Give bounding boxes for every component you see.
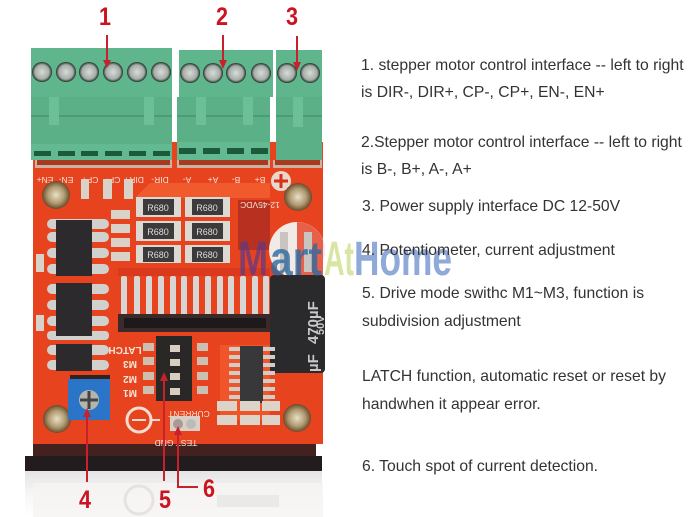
power resistors: R680 (147, 250, 169, 260)
silkscreen pin labels: EN+ (37, 175, 53, 185)
arrow 2 (216, 3, 228, 69)
description 3: 3. Power supply interface DC 12-50V (362, 198, 621, 215)
small SMD parts (36, 179, 133, 331)
arrow 6: 6 (203, 475, 215, 503)
blue potentiometer (68, 375, 110, 420)
description latch: LATCH function, automatic reset or reset by (362, 368, 666, 385)
terminal block 3 (276, 50, 322, 160)
arrow 6 (174, 426, 215, 503)
silkscreen switch labels: LATCH (108, 344, 142, 355)
driver chip U5 (229, 346, 275, 403)
arrow 3: 3 (286, 3, 298, 31)
capacitor body (270, 275, 327, 373)
terminal block 1 (31, 48, 172, 160)
description 2: is B-, B+, A-, A+ (361, 161, 472, 178)
description 1 (361, 57, 684, 101)
description 1: is DIR-, DIR+, CP-, CP+, EN-, EN+ (361, 84, 605, 101)
description 5 (362, 285, 644, 330)
watermark: M (238, 233, 268, 286)
capacitor body: µF (305, 354, 322, 372)
capacitor body: 470µF (305, 301, 322, 344)
optocoupler chips (47, 219, 109, 371)
arrow 1 (99, 3, 111, 68)
power resistors: R680 (147, 227, 169, 237)
arrow 5 (159, 372, 171, 514)
red circuit board (33, 142, 323, 444)
description 2: 2.Stepper motor control interface -- left to right (361, 134, 683, 151)
silkscreen switch labels: M2 (123, 373, 137, 384)
power resistors: R680 (147, 203, 169, 213)
plus marker (271, 171, 291, 191)
description latch (362, 368, 666, 413)
arrow 1: 1 (99, 3, 111, 31)
status LEDs (217, 401, 280, 425)
base plate heat sink (25, 440, 322, 471)
description 5: subdivision adjustment (362, 313, 521, 330)
description 6: 6. Touch spot of current detection. (362, 458, 598, 475)
power resistors (136, 197, 230, 263)
silkscreen pin labels: 12-45VDC (240, 200, 280, 210)
silkscreen pin labels: B+ (255, 175, 265, 185)
watermark: At (324, 233, 354, 286)
power resistors: R680 (196, 227, 218, 237)
test points (170, 416, 200, 431)
arrow 2: 2 (216, 3, 228, 31)
mounting screws (42, 181, 312, 433)
arrow 3 (286, 3, 301, 71)
current dial marking (127, 408, 160, 432)
driver pins and connector (118, 276, 270, 332)
terminal block 2 (177, 50, 273, 160)
arrow 4 (79, 408, 91, 514)
terminal base strip (35, 160, 322, 168)
silkscreen switch labels: CURRENT (168, 409, 210, 419)
silkscreen pin labels: CP- (106, 175, 120, 185)
silkscreen pin labels: A- (183, 175, 191, 185)
description latch: handwhen it appear error. (362, 396, 541, 413)
watermark (238, 233, 452, 286)
silkscreen pin labels: B- (232, 175, 240, 185)
power resistors: R680 (196, 250, 218, 260)
silkscreen pin labels: EN- (59, 175, 73, 185)
silkscreen switch labels: TEST GND (155, 438, 197, 448)
large electrolytic capacitor top (269, 222, 325, 278)
silkscreen switch labels: M1 (123, 387, 137, 398)
power resistors: R680 (196, 203, 218, 213)
reflection of the board (25, 471, 323, 517)
description 2 (361, 134, 683, 178)
silkscreen pin labels: CP+ (82, 175, 98, 185)
watermark: art (270, 233, 322, 286)
description 1: 1. stepper motor control interface -- left to right (361, 57, 684, 74)
capacitor body: 50V (315, 315, 327, 335)
silkscreen switch labels: M3 (123, 358, 137, 369)
DIP switch (143, 336, 208, 401)
silkscreen pin labels: DIR+ (124, 175, 144, 185)
watermark: Home (354, 233, 452, 286)
silkscreen pin labels (37, 175, 280, 210)
arrow 5: 5 (159, 486, 171, 514)
description 5: 5. Drive mode swithc M1~M3, function is (362, 285, 644, 302)
description 4: 4. Potentiometer, current adjustment (362, 242, 616, 259)
silkscreen pin labels: DIR- (151, 175, 169, 185)
silkscreen pin labels: A+ (208, 175, 218, 185)
arrow 4: 4 (79, 486, 91, 514)
silkscreen switch labels (108, 344, 210, 448)
